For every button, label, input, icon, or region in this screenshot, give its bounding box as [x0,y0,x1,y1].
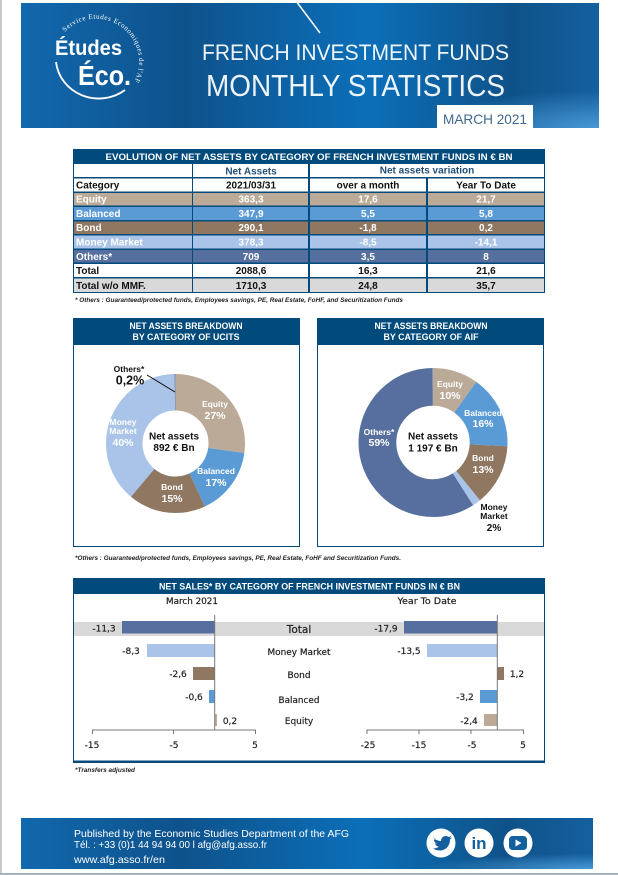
table: net assets evolution: Bond [76,223,102,234]
table: net assets evolution: -8,5 [359,238,377,248]
bar chart: March 2021: March 2021 [166,597,218,607]
donut labels: AIF: Bond [472,453,494,463]
donut labels: AIF: 16% [472,418,494,430]
table: net assets evolution: Net Assets [225,166,277,178]
table: net assets evolution: 8 [483,252,489,263]
bar chart: March 2021: -5 [170,741,178,751]
panel heading: AIF [317,318,544,345]
donut labels: AIF: 2% [487,523,501,534]
table: net assets evolution: 378,3 [238,238,264,248]
donut labels: UCITS [109,399,235,505]
donut labels: UCITS: 15% [161,493,183,505]
panel heading: UCITS [73,318,300,345]
panel heading: UCITS: NET ASSETS BREAKDOWN [130,321,243,332]
icon: linkedin: in [471,834,487,853]
panel heading: net sales [73,578,545,594]
category labels [268,624,331,727]
donut labels: AIF: 10% [439,390,461,402]
bar chart: Year To Date: -15 [412,741,426,751]
table: net assets evolution: 363,3 [238,194,264,206]
donut labels: UCITS: 40% [112,437,134,449]
table: net assets evolution: Net assets variation [380,166,474,176]
table: net assets evolution: Year To Date [456,180,516,192]
table: net assets evolution: -1,8 [359,223,377,234]
footer text [73,828,349,866]
table: net assets evolution: Category [76,180,120,192]
bar chart: March 2021: -8,3 [122,647,140,657]
table: net assets evolution: 21,7 [476,194,496,206]
category labels: Money Market [268,648,331,658]
net sales footnote: *Transfers adjusted [75,767,135,774]
table: net assets evolution: over a month [337,180,399,192]
donut labels: UCITS: 27% [204,410,226,422]
title: MONTHLY STATISTICS [206,68,505,103]
donut labels: UCITS: Bond [161,482,183,492]
table: net assets evolution: 16,3 [358,266,378,277]
footer banner [21,818,593,869]
table: net assets evolution: 5,8 [479,209,493,220]
donut labels: AIF: Net assets [408,432,458,442]
footer text: www.afg.asso.fr/en [73,854,165,866]
donut labels: AIF: Others* [364,427,395,437]
panel: UCITS breakdown [73,318,300,546]
donut footnote: *Others : Guaranteed/protected funds, Employees savings, PE, Real Estate, FoHF and Securitization Funds. [75,555,401,562]
donut labels: AIF: Equity [437,379,463,389]
donut labels: AIF: 59% [368,437,390,449]
table: net assets evolution: 2088,6 [236,266,267,277]
bar chart: Year To Date: -13,5 [397,647,421,657]
table: net assets evolution: 35,7 [476,281,496,292]
callout: others 0,2%: Others* [114,364,145,374]
logo: Études Éco: Éco. [78,60,131,91]
table: net assets evolution: -14,1 [475,238,498,248]
donut labels: UCITS: Net assets [149,432,199,442]
footer text: Published by the Economic Studies Department of the AFG [74,828,349,840]
bar chart: March 2021: -2,6 [169,670,187,680]
table: net assets evolution: 2021/03/31 [226,180,276,192]
date badge: MARCH 2021 [443,111,527,127]
donut labels: UCITS: Money [110,417,137,427]
table: net assets evolution: 709 [243,252,260,263]
title [202,40,509,103]
title: FRENCH INVESTMENT FUNDS [202,40,509,65]
donut chart: UCITS [124,392,227,495]
donut labels: AIF: 1 197 € Bn [408,444,458,454]
table: net assets evolution: 3,5 [361,252,375,263]
donut labels: UCITS: 17% [205,477,227,489]
table: net assets evolution: Total [76,266,99,277]
table: net assets evolution: 24,8 [358,281,378,292]
table: net assets evolution: 0,2 [479,223,493,234]
bar chart: Year To Date: -3,2 [456,693,474,703]
donut labels: UCITS: Market [109,426,137,436]
panel heading: AIF: BY CATEGORY OF AIF [384,332,479,343]
bar chart: Year To Date: -5 [468,741,476,751]
table: net assets evolution: 21,6 [476,266,496,277]
donut labels: UCITS: Equity [202,399,228,409]
donut labels: UCITS: Balanced [197,466,235,476]
icon: linkedin [464,828,494,858]
bar chart: Year To Date: 1,2 [510,670,524,680]
donut labels: AIF: Market [480,511,508,521]
logo: Études Éco [55,14,144,100]
bar chart: March 2021: -15 [85,741,99,751]
donut labels: UCITS: 892 € Bn [153,443,195,454]
date badge [437,105,533,128]
donut labels: AIF: Balanced [464,408,502,418]
bar chart: Year To Date: -25 [361,741,375,751]
bar chart: Year To Date: -2,4 [460,717,478,727]
panel: net sales [73,578,545,762]
bar chart: March 2021: 0,2 [223,717,237,727]
table: net assets evolution: 290,1 [238,223,264,234]
bar chart: March 2021: -0,6 [185,693,203,703]
table: net assets evolution: 17,6 [358,194,378,206]
bar chart: Year To Date: -17,9 [374,624,398,634]
bar chart: Year To Date [361,597,526,751]
category labels: Bond [287,671,311,681]
bar chart: March 2021: -11,3 [92,624,116,634]
donut labels: AIF: Money [481,502,508,512]
category labels: Balanced [278,696,320,706]
logo: Études Éco: Études [55,37,122,60]
panel heading: AIF: NET ASSETS BREAKDOWN [374,321,488,332]
callout: others 0,2% [114,364,175,392]
table: net assets evolution: Money Market [76,238,143,248]
category labels: Total [286,624,311,636]
donut chart: AIF [377,387,489,498]
category labels: Equity [285,717,314,727]
panel: AIF breakdown [317,318,544,546]
table: net assets evolution: 1710,3 [236,281,267,292]
callout: others 0,2%: 0,2% [116,374,144,388]
icon: youtube [504,828,532,858]
table: net assets evolution: Balanced [76,209,120,220]
table: net assets evolution: Total w/o MMF. [76,281,146,292]
bar chart: March 2021: 5 [252,741,258,751]
bar chart: Year To Date: Year To Date [396,597,457,607]
table: net assets evolution: Others* [76,252,112,263]
panel heading: UCITS: BY CATEGORY OF UCITS [132,332,240,343]
bar chart: March 2021 [85,597,258,751]
table: net assets evolution [73,149,545,293]
panel heading: net sales: NET SALES* BY CATEGORY OF FRENCH INVESTMENT FUNDS IN € BN [159,582,460,592]
icon: twitter [426,828,456,858]
footer text: Tél. : +33 (0)1 44 94 94 00 l afg@afg.asso.fr [74,839,267,851]
table: net assets evolution: 5,5 [361,209,375,220]
table: net assets evolution: 347,9 [238,209,264,220]
table: net assets evolution: Equity [76,194,107,206]
bar chart: Year To Date: 5 [520,741,526,751]
donut labels: AIF [364,379,508,534]
table title: EVOLUTION OF NET ASSETS BY CATEGORY OF FRENCH INVESTMENT FUNDS IN € BN [106,152,513,163]
donut labels: AIF: 13% [472,464,494,476]
table footnote: * Others : Guaranteed/protected funds, Employees savings, PE, Real Estate, FoHF, and Securitization Funds [75,297,403,304]
header banner [21,3,599,128]
